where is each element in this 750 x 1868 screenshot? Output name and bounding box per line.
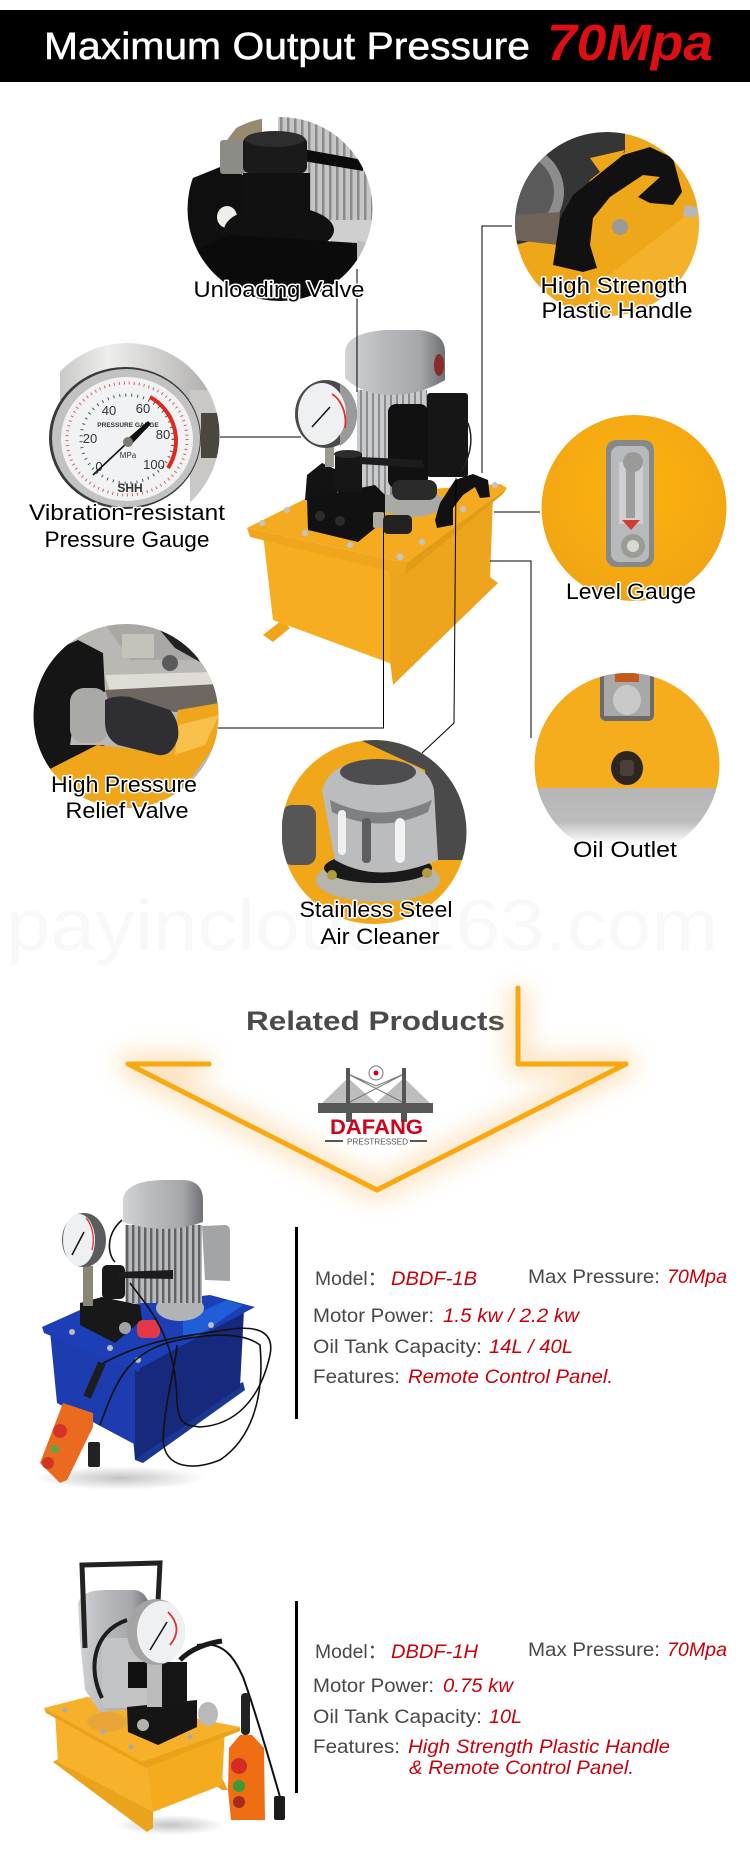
features: Features:	[313, 1366, 400, 1388]
icon: bridge	[318, 1068, 433, 1122]
motor power: 1.5 kw / 2.2 kw	[443, 1305, 581, 1327]
photo: unloading valve	[187, 117, 373, 303]
tank	[42, 1295, 255, 1463]
callout: oil outlet	[534, 664, 720, 862]
logo: DAFANG	[318, 1066, 433, 1146]
plug	[274, 1796, 285, 1820]
black plastic handle	[435, 474, 490, 528]
section heading: Related Products	[246, 1006, 505, 1036]
model	[315, 1268, 477, 1290]
tank	[44, 1697, 240, 1832]
photo: gauge: 100	[143, 457, 165, 472]
max pressure: 70Mpa	[667, 1266, 727, 1288]
features: High Strength Plastic Handle	[408, 1736, 670, 1758]
photo: gauge	[49, 343, 220, 509]
photo: oil outlet	[534, 664, 720, 844]
photo: relief valve	[33, 624, 219, 808]
divider	[295, 1601, 298, 1793]
photo: gauge: SHH	[117, 481, 143, 495]
motor power	[313, 1305, 581, 1327]
callout: level gauge	[541, 415, 727, 604]
photo: gauge: 20	[83, 431, 97, 446]
cable grip	[180, 1641, 222, 1660]
label: Stainless Steel	[300, 897, 452, 922]
max pressure	[528, 1266, 727, 1288]
label: High Strength	[540, 273, 688, 298]
label: Level Gauge	[566, 579, 696, 604]
oil tank: 10L	[489, 1706, 522, 1728]
model	[315, 1641, 479, 1663]
cables	[100, 1220, 271, 1466]
photo: gauge: PRESSURE GAUGE	[97, 422, 159, 429]
max pressure: Max Pressure:	[528, 1639, 660, 1661]
label: High Pressure	[51, 772, 197, 797]
label	[300, 897, 452, 949]
motor	[123, 1180, 230, 1321]
photo: gauge: 80	[156, 427, 170, 442]
brand name: DAFANG	[330, 1116, 423, 1139]
shadow	[115, 1815, 225, 1835]
callout: air cleaner	[282, 740, 467, 949]
remote control	[40, 1363, 102, 1483]
relief knob	[373, 512, 412, 534]
photo: air cleaner	[282, 740, 467, 924]
tagline: PRESTRESSED	[347, 1136, 408, 1146]
max pressure: Max Pressure:	[528, 1266, 660, 1288]
features: & Remote Control Panel.	[409, 1757, 634, 1779]
motor power	[313, 1675, 515, 1697]
remote control	[228, 1693, 265, 1820]
label: Unloading Valve	[194, 277, 364, 302]
motor	[345, 330, 445, 517]
label: Vibration-resistant	[29, 500, 225, 525]
valve block	[127, 1662, 218, 1745]
features: Features:	[313, 1736, 400, 1758]
pressure gauge	[295, 380, 357, 467]
label: Relief Valve	[66, 798, 188, 823]
label: Pressure Gauge	[44, 527, 210, 552]
main pump illustration	[247, 330, 507, 685]
valve block	[305, 450, 385, 542]
photo: gauge: 40	[102, 403, 116, 418]
photo: gauge: 60	[136, 401, 150, 416]
lever	[360, 457, 424, 468]
product 2: yellow pump	[44, 1563, 285, 1835]
callout lines	[218, 226, 540, 753]
product 1: blue pump	[35, 1180, 271, 1490]
watermark: payincloud.163.com	[6, 886, 718, 966]
frame handle	[82, 1563, 160, 1648]
terminal box and capacitor	[388, 393, 471, 500]
model: DBDF-1H	[391, 1641, 479, 1663]
motor power: Motor Power:	[313, 1675, 434, 1697]
arrow frame	[128, 988, 626, 1190]
callout: unloading valve	[187, 117, 373, 303]
photo: level gauge	[541, 415, 727, 601]
max pressure: 70Mpa	[667, 1639, 727, 1661]
title value: 70Mpa	[547, 14, 713, 71]
label: Plastic Handle	[542, 298, 692, 323]
photo: handle	[515, 132, 699, 316]
gauge	[62, 1213, 106, 1306]
features	[313, 1736, 670, 1779]
callout: pressure gauge	[29, 343, 225, 552]
valve block	[80, 1265, 173, 1343]
model: Model：	[315, 1268, 387, 1290]
oil tank	[313, 1336, 573, 1358]
motor power: Motor Power:	[313, 1305, 434, 1327]
oil tank: 14L / 40L	[489, 1336, 573, 1358]
features	[313, 1366, 613, 1388]
model: DBDF-1B	[391, 1268, 477, 1290]
oil tank: Oil Tank Capacity:	[313, 1336, 482, 1358]
max pressure	[528, 1639, 727, 1661]
plug	[88, 1442, 100, 1467]
tank	[247, 482, 507, 685]
label: Air Cleaner	[320, 924, 440, 949]
motor	[78, 1590, 150, 1712]
label	[540, 273, 692, 323]
callout: relief valve	[33, 624, 219, 823]
shadow	[35, 1466, 205, 1490]
photo: gauge: MPa	[120, 451, 137, 460]
label	[29, 500, 225, 552]
features: Remote Control Panel.	[408, 1366, 613, 1388]
header banner	[0, 10, 750, 82]
photo: gauge: 0	[95, 459, 103, 474]
label	[51, 772, 197, 823]
model: Model：	[315, 1641, 387, 1663]
product 2 specs	[313, 1639, 727, 1779]
title: Maximum Output Pressure	[44, 26, 530, 68]
red knob	[137, 1320, 160, 1338]
callout: handle	[515, 132, 699, 318]
gauge	[127, 1599, 185, 1665]
oil tank: Oil Tank Capacity:	[313, 1706, 482, 1728]
motor power: 0.75 kw	[443, 1675, 515, 1697]
power cable	[197, 1644, 280, 1797]
icon: target	[369, 1066, 383, 1080]
divider	[295, 1227, 298, 1419]
label: Oil Outlet	[573, 837, 677, 862]
product 1 specs	[313, 1266, 727, 1388]
